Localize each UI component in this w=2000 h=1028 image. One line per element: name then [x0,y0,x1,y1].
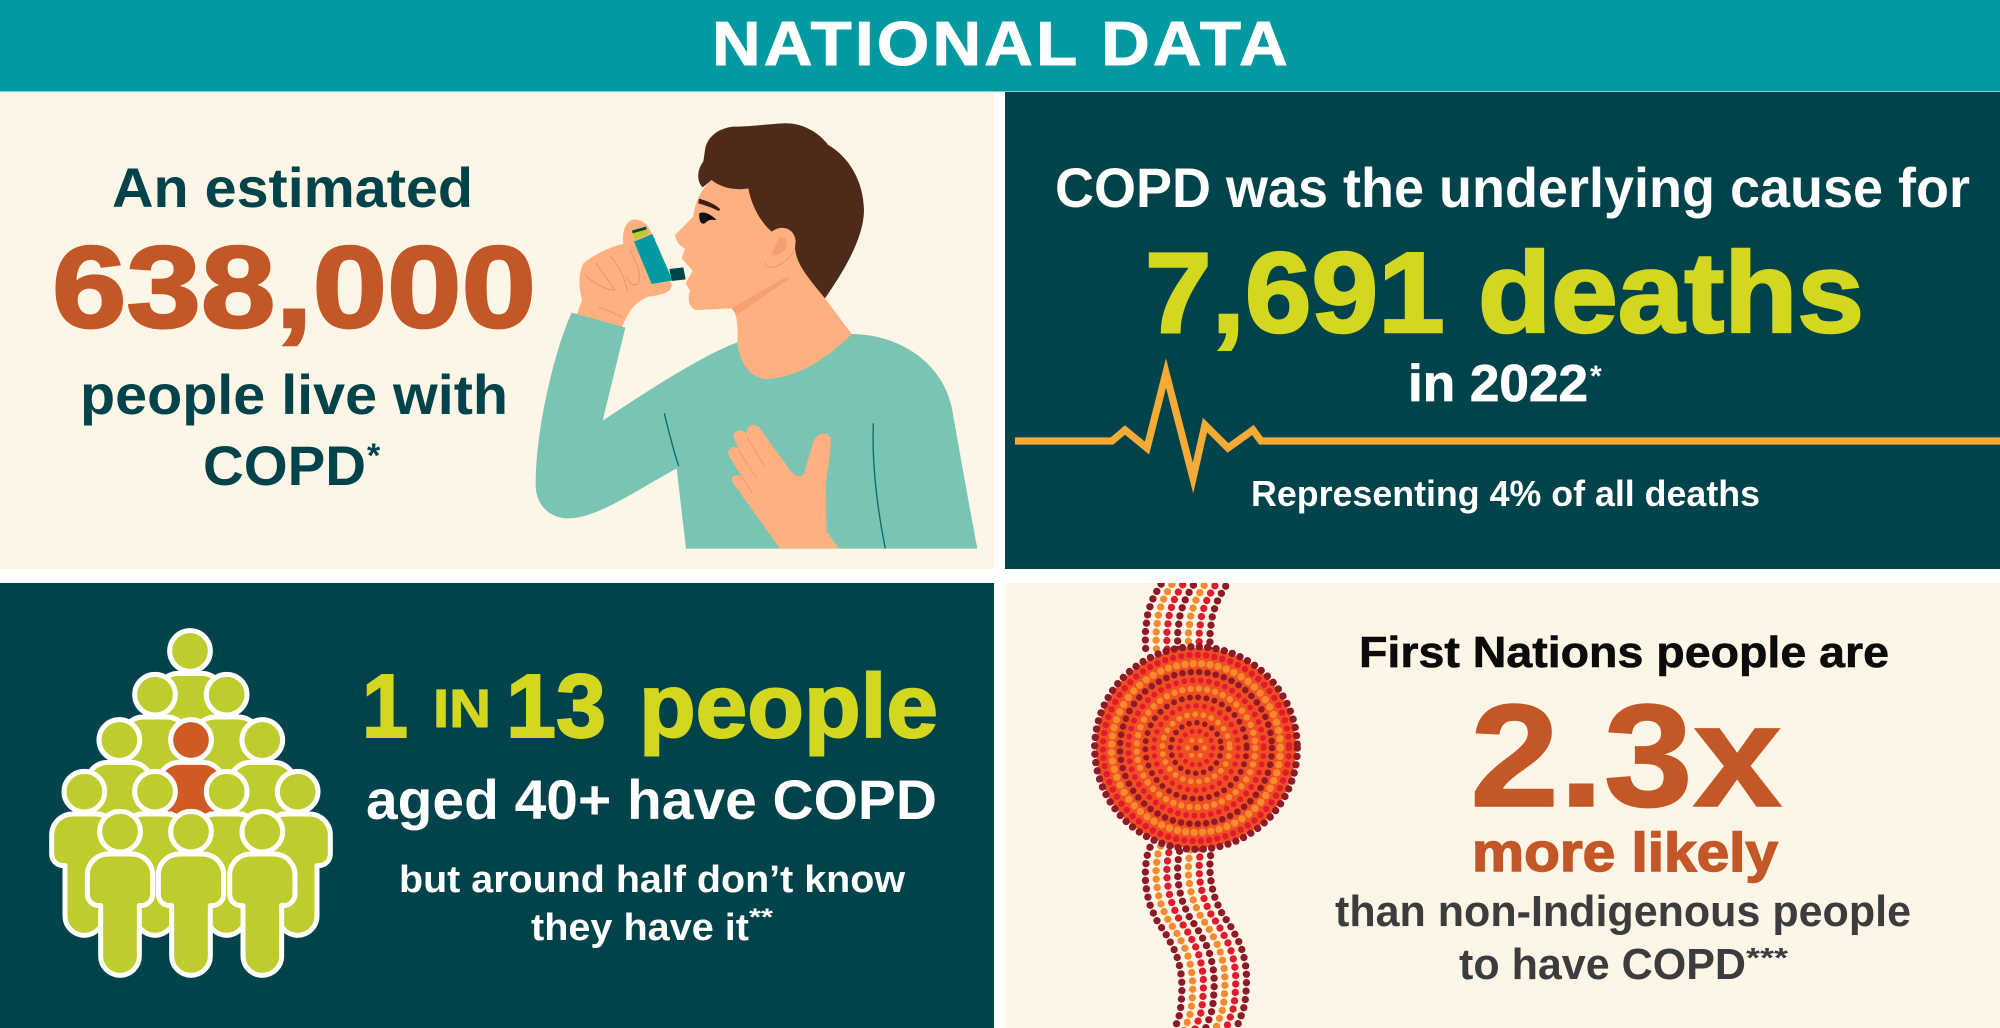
head and neck [675,180,852,379]
hand with inhaler [575,219,672,333]
dotted lines top and bottom [1145,577,1247,1028]
text: they have it**: they have it [531,907,749,949]
panel: First Nations [1005,577,2000,1028]
inhaler [632,226,686,284]
panel: 1 in 13 [0,583,994,1028]
text: aged 40+ have COPD: aged 40+ have COPD [366,768,937,831]
artwork: dot painting [1095,577,1297,1028]
text: to have COPD***: *** [1746,942,1788,973]
text: than non-Indigenous people: than non-Indigenous people [1335,887,1911,936]
text: COPD was the underlying cause for: COPD was the underlying cause for [1055,156,1970,219]
statistic: 1 in 13 people: 1 [362,657,408,757]
neck crease [732,277,790,315]
text: COPD*: * [367,437,381,475]
text: people live with: people live with [80,363,508,426]
panel: deaths [1005,92,2000,569]
statistic: 1 in 13 people: people [639,657,938,757]
hand on chest [728,425,839,549]
statistic: 7,691 deaths: 7,691 deaths [1145,230,1864,357]
heartbeat line [1015,373,2000,478]
header banner [0,0,2000,92]
illustration: man using inhaler [536,123,977,549]
statistic: 1 in 13 people: 13 [506,657,606,757]
statistic: 638,000: 638,000 [52,222,536,352]
ear [767,228,796,268]
hair [698,123,864,298]
text: COPD*: COPD [203,434,366,497]
text: they have it**: ** [749,904,774,931]
concentric dot circle [1095,647,1297,849]
text: but around half don't know: but around half don’t know [399,859,905,901]
text: more likely: more likely [1472,821,1778,883]
panel: people living with COPD [0,92,994,569]
text: First Nations people are: First Nations people are [1359,628,1889,677]
text: representing 4% of all deaths: Representing 4% of all deaths [1251,473,1760,514]
statistic: 1 in 13 people: IN [433,679,491,739]
text: An estimated: An estimated [112,156,473,219]
text: in 2022*: * [1590,360,1602,393]
shirt [536,313,977,549]
sleeve fold lines [664,413,885,549]
text: to have COPD***: to have COPD [1459,940,1746,989]
icon: crowd of people with one highlighted [52,631,330,975]
eye and brow [698,199,720,211]
statistic: 1 in 13 people [362,657,938,757]
statistic: 2.3x: 2.3x [1470,674,1782,837]
title: NATIONAL DATA [712,10,1291,79]
text: in 2022*: in 2022 [1408,355,1588,413]
